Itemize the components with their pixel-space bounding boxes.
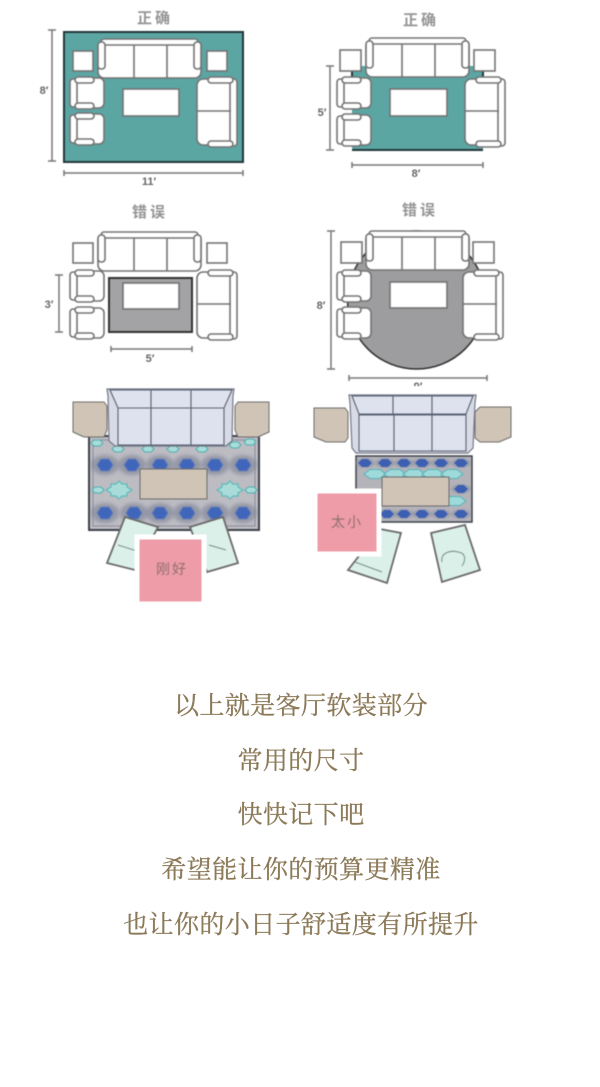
teal rug (352, 66, 483, 150)
dimension 3 ft: 3′ (45, 299, 54, 311)
dimension 5 ft (318, 66, 334, 150)
loveseat (197, 270, 237, 340)
dimension 9 ft: 9′ (414, 381, 423, 393)
dimension 5 ft: 5′ (146, 353, 155, 365)
coffee table (390, 89, 447, 116)
dimension 9 ft (349, 375, 487, 393)
side tables (340, 50, 495, 71)
heading: wrong right: 错误 (402, 202, 438, 219)
dimension 8 ft: 8′ (40, 85, 49, 97)
dimension 8 ft: 8′ (317, 300, 326, 312)
panel: wrong round rug (317, 202, 503, 393)
coffee table (123, 283, 179, 309)
accent chairs (348, 525, 480, 583)
accent chairs (107, 517, 238, 572)
dimension 11 ft: 11′ (142, 176, 156, 188)
armchairs (70, 270, 104, 339)
coffee table (382, 477, 449, 506)
callout: too small: 太小 (331, 514, 363, 530)
line 4: 希望能让你的预算更精准 (161, 856, 441, 884)
line 1: 以上就是客厅软装部分 (174, 692, 428, 720)
dimension 8 ft (317, 231, 335, 369)
heading: correct right: 正确 (403, 12, 439, 29)
sofa (98, 39, 201, 78)
line 3: 快快记下吧 (237, 801, 365, 829)
heading: correct left: 正确 (137, 10, 173, 27)
round rug (348, 231, 486, 369)
armchairs (70, 77, 104, 145)
coffee table (140, 469, 207, 499)
side tables (73, 243, 227, 263)
callout: too small (315, 491, 379, 554)
dimension 3 ft (45, 275, 63, 332)
armchairs (337, 77, 371, 146)
line 2: 常用的尺寸 (237, 747, 365, 775)
sofa (366, 231, 469, 270)
dimension 5 ft: 5′ (318, 107, 327, 119)
panel: wrong 5x3 rug (45, 204, 237, 365)
sofa (366, 38, 469, 77)
gray rug (109, 278, 192, 332)
panel: correct 8x5 rug (318, 12, 505, 180)
sofa (98, 232, 201, 271)
side tables (341, 242, 494, 263)
callout: just right (137, 537, 204, 604)
rug edge (352, 71, 483, 150)
patterned rug (89, 436, 259, 530)
panel: illustration just right (73, 389, 269, 604)
sofa (349, 395, 476, 453)
heading: wrong left: 错误 (132, 204, 168, 221)
dimension 8 ft (352, 162, 483, 180)
callout: just right: 刚好 (156, 561, 188, 577)
panel: correct 11x8 rug (40, 10, 243, 188)
teal rug (64, 32, 243, 162)
dimension 11 ft (64, 170, 243, 188)
armchairs (337, 270, 371, 339)
white cover over clipped area (300, 386, 600, 394)
loveseat (465, 77, 505, 147)
loveseat (197, 77, 237, 147)
dimension 8 ft (40, 30, 56, 161)
coffee table (390, 282, 447, 308)
line 5: 也让你的小日子舒适度有所提升 (123, 911, 479, 939)
side tables (314, 407, 511, 442)
sofa (107, 389, 234, 446)
dimension 8 ft: 8′ (412, 168, 421, 180)
text block: closing message (123, 692, 479, 939)
panel: illustration too small (314, 395, 511, 583)
patterned rug (355, 456, 472, 522)
loveseat (463, 270, 503, 340)
side tables (73, 402, 269, 437)
side tables (73, 51, 227, 71)
dimension 5 ft (111, 346, 192, 365)
coffee table (123, 89, 179, 116)
